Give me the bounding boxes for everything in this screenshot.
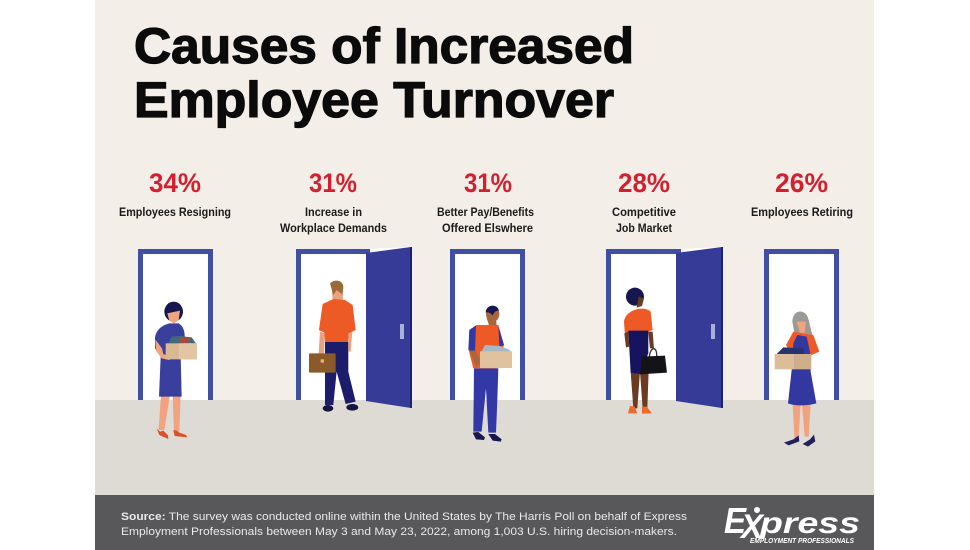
logo: Express Employment Professionals	[724, 500, 860, 546]
logo: Express Employment Professionals: press	[759, 507, 860, 540]
stat: 31% increase in workplace demands: Workplace Demands	[280, 223, 387, 235]
stat: 31% increase in workplace demands: 31%	[309, 168, 357, 198]
figure: man with box	[468, 306, 512, 442]
stat: 31% better pay/benefits	[437, 168, 534, 235]
stat: 34% employees resigning	[119, 168, 231, 219]
logo: Express Employment Professionals: X	[739, 508, 765, 546]
stat: 34% employees resigning: Employees Resigning	[119, 207, 231, 219]
source text: Source: The survey was conducted online within the United States by The Harris Poll on behalf of Express	[121, 511, 688, 523]
stat: 34% employees resigning: 34%	[149, 168, 201, 198]
logo: Express Employment Professionals: EMPLOYMENT PROFESSIONALS	[750, 538, 854, 545]
stat: 26% employees retiring: Employees Retiring	[751, 207, 853, 219]
door 1	[138, 249, 213, 400]
figure: older woman with box	[775, 311, 819, 447]
stat: 26% employees retiring	[751, 168, 853, 219]
door 3	[450, 249, 525, 400]
source text	[121, 511, 688, 538]
door 4 open	[606, 247, 723, 408]
stat: 31% increase in workplace demands: Increase in	[305, 207, 362, 219]
figure: woman with box	[155, 302, 197, 439]
title: Employee Turnover	[134, 72, 614, 128]
door 5	[764, 249, 839, 400]
title: Causes of Increased	[134, 18, 634, 74]
stat: 28% competitive job market: 28%	[618, 168, 670, 198]
figure: man with briefcase	[309, 281, 358, 412]
footer bar	[95, 495, 874, 550]
stat: 26% employees retiring: 26%	[775, 168, 828, 198]
figure: woman with handbag	[624, 288, 667, 414]
door 2 open	[296, 247, 412, 408]
source text: Employment Professionals between May 3 and May 23, 2022, among 1,003 U.S. hiring decision-makers.	[121, 526, 677, 538]
stat: 31% better pay/benefits: 31%	[464, 168, 512, 198]
stat: 31% better pay/benefits: Better Pay/Benefits	[437, 207, 534, 219]
logo: Express Employment Professionals: E	[724, 500, 747, 541]
stat: 31% increase in workplace demands	[280, 168, 387, 235]
stat: 28% competitive job market: Competitive	[612, 207, 676, 219]
stat: 28% competitive job market	[612, 168, 676, 235]
stat: 28% competitive job market: Job Market	[616, 223, 672, 235]
title	[134, 18, 634, 128]
stat: 31% better pay/benefits: Offered Elswhere	[442, 223, 533, 235]
